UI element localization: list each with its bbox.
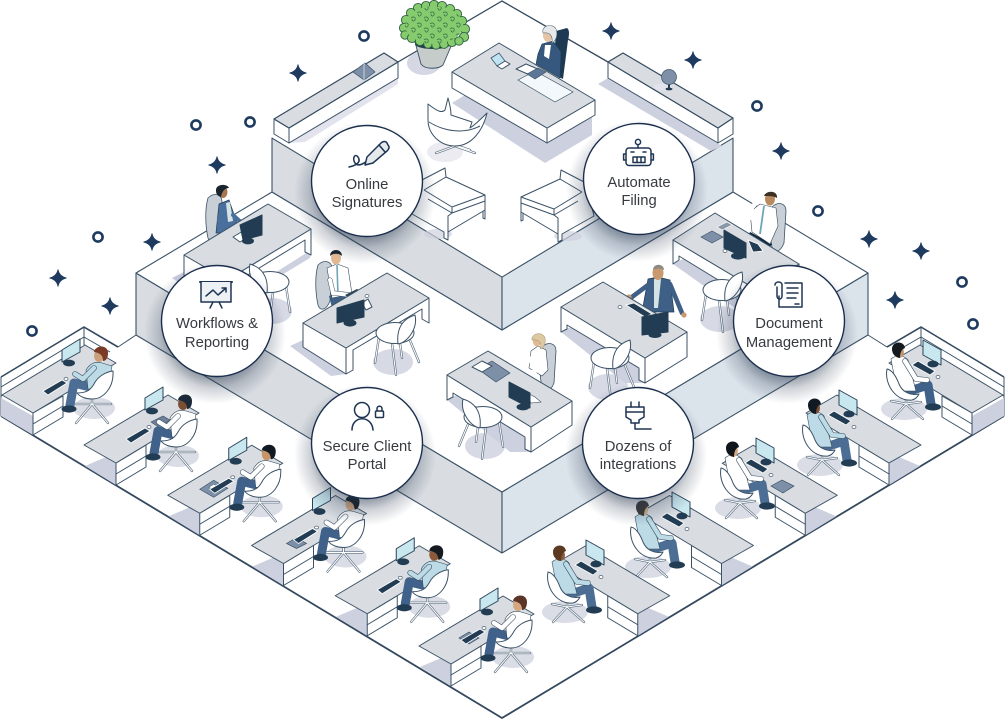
badge: Document Management: Management: [746, 335, 832, 351]
workstation R1: [881, 340, 1004, 435]
icon: plug: [626, 402, 651, 429]
icon: robot: [624, 139, 653, 166]
monitor back D4: [723, 230, 763, 260]
badge: Secure Client Portal: [294, 384, 436, 526]
icon: user with lock: [352, 402, 384, 430]
chair D4: [700, 272, 746, 332]
papers: [516, 64, 546, 79]
executive chair and person: [536, 26, 569, 79]
level 3 floor: [272, 0, 733, 277]
executive desk: [452, 26, 595, 163]
badge: Online Signatures: [294, 122, 436, 264]
person at desk D5: [524, 334, 556, 391]
badge: Document Management: [716, 262, 858, 404]
workstation L2: [84, 387, 199, 485]
level 2 walls: [118, 273, 887, 553]
decorative rings: [27, 31, 978, 336]
icon: pyramid ornament: [353, 63, 375, 80]
decorative stars: [50, 22, 930, 314]
chair D5: [459, 399, 505, 459]
white desk sheet: [518, 71, 573, 102]
person at desk D4: [747, 192, 786, 251]
badge: Dozens of integrations: integrations: [600, 457, 676, 473]
icon: presentation board: [200, 282, 232, 308]
badge: Secure Client Portal: Secure Client: [323, 439, 411, 455]
workstation R2: [797, 390, 921, 485]
workstation R4: [625, 492, 754, 586]
left sofa: [412, 168, 485, 240]
workstation L4: [252, 488, 366, 586]
level 3 walls: [272, 138, 733, 330]
desk D3: centre right: [561, 265, 687, 400]
level 2 floor: [136, 192, 868, 492]
right sofa: [521, 170, 594, 242]
chair D3: [588, 340, 634, 400]
monitor back D3: [642, 312, 668, 338]
left cubicle wall: [1, 327, 118, 416]
egg armchair: [427, 98, 487, 162]
workstation L6: [419, 588, 534, 686]
potted plant: [399, 0, 470, 75]
badge: Dozens of integrations: Dozens of: [605, 439, 672, 455]
badge: Workflows & Reporting: Reporting: [185, 335, 249, 351]
badge: Workflows & Reporting: [144, 262, 286, 404]
right back bench: [598, 53, 733, 151]
monitor back D1: [233, 215, 262, 244]
monitor back D2: [337, 299, 372, 327]
badge: Automate Filing: Filing: [621, 193, 657, 209]
badge: Dozens of integrations: [565, 384, 707, 526]
workstation L3: [168, 437, 283, 535]
badge: Document Management: Document: [755, 316, 823, 332]
icon: pen signature: [349, 142, 389, 167]
badge: Secure Client Portal: Portal: [348, 457, 386, 473]
laptop: [491, 53, 510, 69]
badge: Automate Filing: [566, 120, 708, 262]
badge: Workflows & Reporting: Workflows &: [176, 316, 258, 332]
chair D1: [246, 264, 292, 324]
monitor back D5: [509, 382, 541, 410]
person at desk D2: [316, 250, 361, 309]
person at desk D3: [626, 265, 687, 318]
person at desk D1: [206, 185, 244, 245]
documents D5: [472, 361, 510, 382]
document pad D4: [701, 231, 723, 243]
icon: clipped document: [775, 282, 802, 307]
badge: Online Signatures: Online: [346, 177, 388, 193]
desk D1: upper left: [172, 185, 311, 324]
desk D4: upper right: [673, 192, 799, 332]
right cubicle wall: [887, 327, 1004, 416]
desk D5: lower centre: [447, 334, 572, 459]
left back bench: [274, 53, 398, 143]
badge: Online Signatures: Signatures: [332, 195, 402, 211]
chair D2: [373, 315, 419, 375]
badge: Automate Filing: Automate: [607, 175, 671, 191]
workstation L5: [335, 538, 450, 636]
workstation R3: [715, 438, 837, 535]
icon: globe: [654, 70, 676, 90]
desk D2: centre left: [290, 250, 429, 376]
workstation L1: [1, 339, 116, 435]
workstation R5: [542, 540, 670, 636]
